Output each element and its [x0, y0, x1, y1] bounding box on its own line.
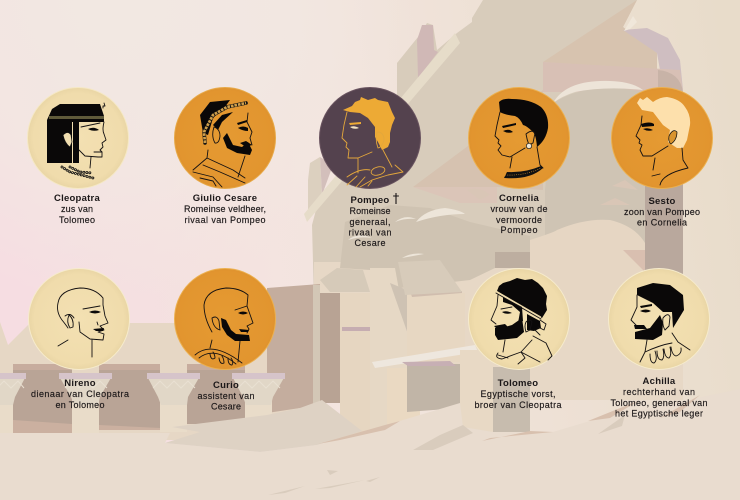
icon: dagger cross: † [393, 192, 400, 207]
panel: Achilla [608, 268, 710, 418]
ruin: purple dome [623, 28, 683, 90]
portrait: Pompeo [320, 88, 420, 188]
portrait: Curio [174, 268, 276, 370]
name: Cleopatra: Cleopatra [54, 193, 100, 204]
role: Curio: Cesare [211, 402, 241, 412]
role: Tolomeo [474, 389, 562, 410]
ruin: upper wall mass [312, 0, 657, 300]
ruin: column one [340, 293, 370, 442]
role: Achilla: het Egyptische leger [615, 408, 703, 418]
role: Achilla: rechterhand van [623, 387, 695, 397]
panel: Cleopatra [28, 88, 128, 225]
ruin: column two [370, 268, 410, 435]
name: Cornelia: Cornelia [499, 193, 539, 204]
role: Curio [198, 391, 254, 412]
role: Nireno [31, 389, 129, 410]
role: Giulio Cesare: Romeinse veldheer, [184, 204, 266, 214]
portrait: Cleopatra [28, 88, 128, 188]
ground: dune shadow [165, 400, 362, 452]
role: Cleopatra: Tolomeo [59, 215, 95, 225]
ground: terracotta shadow [318, 395, 700, 444]
role: Achilla: Tolomeo, generaal van [610, 398, 708, 408]
portrait: Cornelia [468, 88, 570, 188]
ruin: brown wall [267, 284, 320, 413]
role: Tolomeo: broer van Cleopatra [474, 400, 562, 410]
ruin: cream highlight [624, 16, 637, 31]
name: Nireno: Nireno [64, 378, 96, 389]
role: Cornelia: vrouw van de [490, 204, 548, 214]
role: Cleopatra: zus van [61, 204, 93, 214]
ruin: dark column [645, 180, 683, 298]
panel: Nireno [28, 268, 130, 410]
portrait: Tolomeo [468, 268, 570, 370]
role: Pompeo [348, 206, 392, 248]
ruin: quarter arch [658, 70, 683, 92]
portrait: Achilla [608, 268, 710, 370]
panel: Cornelia [468, 88, 570, 235]
role: Pompeo: generaal, [350, 217, 390, 227]
left: columns and capitals [0, 373, 285, 436]
ruin: lower block [372, 345, 478, 368]
ruin: pink beam [543, 62, 683, 92]
panel: Giulio Cesare [174, 88, 276, 225]
ruin: right sand plane [314, 262, 683, 400]
ruin: mid capital cluster [340, 205, 530, 288]
ruin: brown triangle upper [543, 0, 657, 70]
role: Curio: assistent van [198, 391, 254, 401]
ruin: brown triangle lower [413, 90, 543, 190]
ruin: left wall [0, 322, 320, 440]
ruin: left pink sliver [320, 157, 333, 195]
name: Pompeo: Pompeo [351, 195, 389, 206]
portrait: Nireno [28, 268, 130, 370]
role: Sesto [624, 207, 700, 228]
ground: sand [0, 389, 740, 500]
role: Pompeo: Romeinse [350, 206, 390, 216]
name: Curio: Curio [213, 380, 239, 391]
role: Nireno: dienaar van Cleopatra [31, 389, 129, 399]
role: Cornelia [490, 204, 548, 235]
role: Tolomeo: Egyptische vorst, [480, 389, 556, 399]
name: Giulio Cesare: Giulio Cesare [193, 193, 257, 204]
panel: Pompeo [320, 88, 420, 248]
role: Sesto: en Cornelia [637, 218, 687, 228]
role: Pompeo: rivaal van [348, 228, 392, 238]
role: Sesto: zoon van Pompeo [624, 207, 700, 217]
panel: Tolomeo [468, 268, 570, 410]
name: Achilla: Achilla [643, 376, 676, 387]
ruin: small tower [417, 25, 438, 78]
name: Tolomeo: Tolomeo [498, 378, 538, 389]
ruin: pink under-beam [413, 187, 497, 203]
panel: Sesto [612, 88, 712, 228]
left: colonnade wall panels [13, 364, 245, 433]
panel: Curio [174, 268, 276, 412]
ruin: pale and grey columns [460, 350, 495, 432]
role: Giulio Cesare [184, 204, 266, 225]
portrait: Sesto [612, 88, 712, 188]
role: Cleopatra [59, 204, 95, 225]
ground: sand shadows [268, 415, 625, 495]
role: Cornelia: vermoorde [496, 215, 542, 225]
ruin: cream diagonal beam [304, 33, 460, 222]
name: Sesto: Sesto [648, 196, 676, 207]
role: Pompeo: Cesare [354, 238, 386, 248]
role: Giulio Cesare: rivaal van Pompeo [184, 215, 266, 225]
role: Achilla [610, 387, 708, 418]
role: Nireno: en Tolomeo [56, 400, 104, 410]
portrait: Giulio Cesare [174, 88, 276, 188]
ruin: dome highlight [553, 81, 643, 103]
ruin: grey dome [545, 88, 683, 260]
ruin: cream dome [530, 220, 645, 300]
ruin: far-left fragment [308, 157, 322, 212]
role: Cornelia: Pompeo [500, 225, 538, 235]
